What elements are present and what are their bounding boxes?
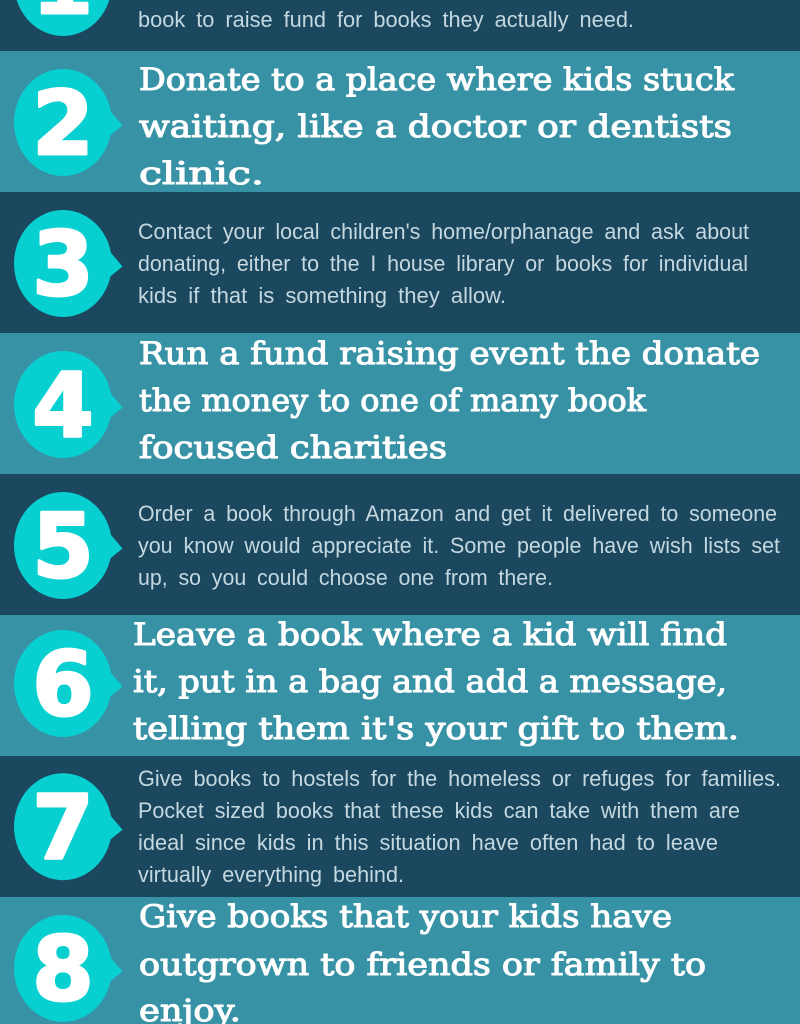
- text: step 3: donating, either to the I house library or books for individual: [138, 251, 748, 276]
- heading: step 6: it, put in a bag and add a message,: [133, 664, 727, 700]
- icon: number 6 bubble: [14, 630, 122, 737]
- icon: number 8 bubble: 8: [32, 918, 94, 1021]
- heading: step 8: [139, 899, 706, 1024]
- text: step 5: Order a book through Amazon and get it delivered to someone: [138, 501, 777, 526]
- panel: step 8: [0, 897, 800, 1024]
- icon: number 4 bubble: [14, 351, 122, 458]
- heading: step 4: the money to one of many book: [139, 383, 646, 419]
- heading: step 2: Donate to a place where kids stuck: [139, 62, 734, 98]
- panel: step 5: [0, 474, 800, 615]
- text: step 7: virtually everything behind.: [138, 862, 404, 887]
- icon: number 3 bubble: 3: [32, 213, 94, 316]
- panel: step 6: [0, 615, 800, 756]
- text: step 5: you know would appreciate it. Some people have wish lists set: [138, 533, 780, 558]
- panel: step 7: [0, 756, 800, 897]
- heading: step 6: Leave a book where a kid will find: [133, 617, 727, 653]
- icon: number 3 bubble: [14, 210, 122, 317]
- panel: step 1: [0, 0, 800, 51]
- text: step 3: [138, 219, 749, 308]
- text: step 1: book to raise fund for books they actually need.: [138, 7, 634, 32]
- icon: number 7 bubble: [14, 773, 122, 880]
- heading: step 8: Give books that your kids have: [139, 899, 672, 935]
- heading: step 4: Run a fund raising event the donate: [139, 336, 760, 372]
- icon: number 5 bubble: 5: [32, 495, 94, 598]
- heading: step 4: focused charities: [139, 430, 447, 466]
- heading: step 8: outgrown to friends or family to: [139, 947, 706, 983]
- icon: number 4 bubble: 4: [32, 354, 94, 457]
- icon: number 5 bubble: [14, 492, 122, 599]
- text: step 7: Pocket sized books that these kids can take with them are: [138, 798, 740, 823]
- heading: step 6: telling them it's your gift to them.: [133, 711, 739, 747]
- text: step 5: [138, 501, 780, 590]
- text: step 7: ideal since kids in this situation have often had to leave: [138, 830, 718, 855]
- text: step 7: [138, 766, 781, 887]
- panel: step 4: [0, 333, 800, 474]
- text: step 5: up, so you could choose one from there.: [138, 565, 553, 590]
- icon: number 2 bubble: 2: [32, 72, 94, 175]
- icon: number 8 bubble: [14, 915, 122, 1022]
- icon: number 2 bubble: [14, 69, 122, 176]
- text: step 7: Give books to hostels for the homeless or refuges for families.: [138, 766, 781, 791]
- heading: step 2: waiting, like a doctor or dentists: [139, 109, 732, 145]
- heading: step 4: [139, 336, 760, 466]
- text: step 3: Contact your local children's home/orphanage and ask about: [138, 219, 749, 244]
- heading: step 6: [133, 617, 739, 747]
- icon: number 6 bubble: 6: [32, 633, 94, 736]
- panel: step 3: [0, 192, 800, 333]
- icon: number 7 bubble: 7: [32, 776, 94, 879]
- heading: step 2: clinic.: [139, 156, 264, 192]
- heading: step 2: [139, 62, 734, 192]
- icon: number 1 bubble: [14, 0, 122, 36]
- panel: step 2: [0, 51, 800, 192]
- text: step 3: kids if that is something they allow.: [138, 283, 506, 308]
